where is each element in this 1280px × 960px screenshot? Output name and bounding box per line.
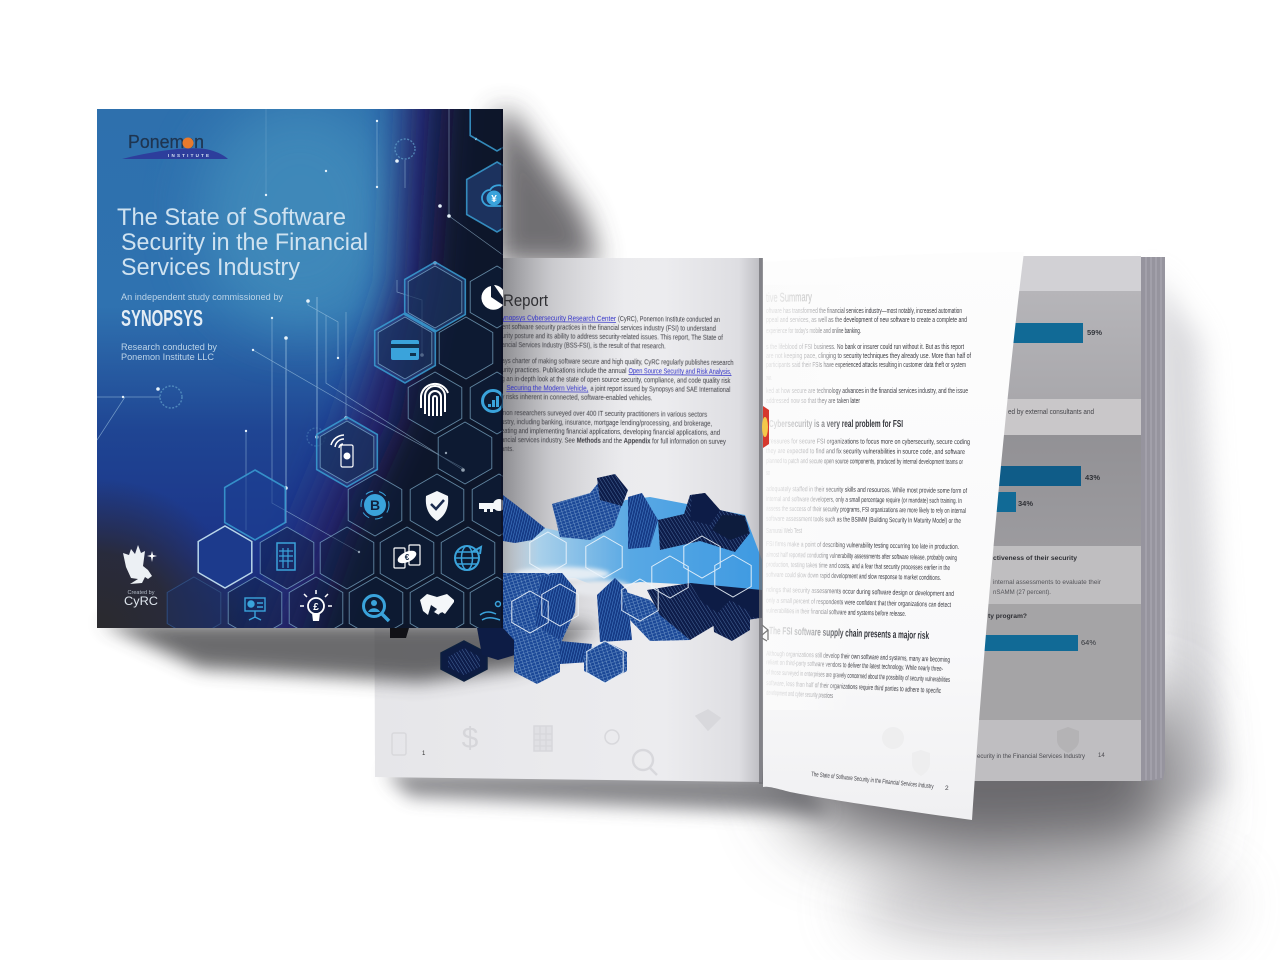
hexagon grid thin: [228, 266, 503, 628]
book cover: [97, 109, 503, 628]
back page stack edge: [1140, 257, 1165, 781]
research conducted by: Ponemon Institute LLC: [121, 352, 214, 363]
cybersecurity paragraph 3: [766, 541, 959, 582]
icon: cloud yen: ¥: [491, 194, 497, 205]
watermark: shield: [912, 750, 930, 776]
cybersecurity paragraph 2: internal and software developers, only a small percentage require (or mandate) such training. In: [766, 496, 962, 505]
icon: presentation board: [245, 598, 265, 620]
icon: handshake: [420, 594, 454, 616]
commissioned by: An independent study commissioned by: [121, 292, 283, 303]
page heading: Executive Summary: tive Summary: [766, 289, 812, 305]
watermark icons: right page: [882, 727, 930, 776]
watermark shield: [1057, 727, 1079, 753]
hexagon fills: lit cells: [225, 162, 527, 540]
icon: shield: [426, 491, 448, 521]
building: top hex: [597, 474, 628, 506]
publisher logo: Ponemon Institute: [122, 134, 228, 159]
band: chart 59%: [980, 291, 1141, 399]
paragraph 1: ynopsys Cybersecurity Research Center: [502, 315, 617, 323]
cybersecurity paragraph 3: software could slow down rapid development and slow response to market conditions.: [766, 572, 941, 582]
body text: [993, 579, 1101, 596]
body text: internal assessments to evaluate their: [993, 579, 1101, 586]
section heading: cybersecurity: Cybersecurity is a very real problem for FSI: [769, 418, 903, 430]
paragraph 1: [502, 315, 723, 351]
watermark: handshake: [696, 710, 720, 730]
swoosh: [122, 148, 228, 159]
icon: search person: [364, 596, 389, 621]
CyRC eagle logo: [123, 545, 158, 608]
cover base: [97, 109, 430, 628]
summary paragraph 2: participants said their FSIs have experienced attacks resulting in customer data theft or system: [766, 362, 966, 369]
supply chain paragraph: software, less than half of their organizations require third parties to adhere to specific: [766, 680, 942, 695]
icon: globe: [455, 546, 481, 570]
paragraph 3: [501, 410, 727, 455]
watermark: calculator: [534, 726, 552, 751]
icon: red gear: [762, 406, 769, 448]
skyline image: upper buildings: [503, 474, 750, 552]
cybersecurity paragraph 4: ndings that security assessments occur during software design or development and: [766, 587, 954, 598]
CyRC wordmark: CyRC: [124, 596, 158, 608]
paragraph 2: y risks inherent in connected, software-enabled vehicles.: [501, 394, 652, 402]
building: connector: [560, 641, 592, 664]
cover shadow on white background: [495, 112, 600, 265]
left open page: [100, 258, 762, 782]
Synopsys logo: SYNOPSYS: [121, 305, 203, 331]
icon: cloud yen: [481, 184, 503, 207]
summary paragraph 2: are not keeping pace, clinging to security techniques they already use. More than half of: [766, 353, 971, 360]
paragraph 2: Securing the Modern Vehicle,: [506, 385, 588, 393]
paragraph 2: ays charter of making software secure and high quality, CyRC regularly publishes research: [502, 358, 734, 367]
band: top: [980, 256, 1141, 291]
summary paragraph 2: [766, 344, 971, 382]
watermark: search: [633, 750, 657, 775]
paragraph 2: [501, 358, 734, 403]
supply chain paragraph: Although organizations still develop their own software and systems, many are becoming: [766, 651, 950, 664]
summary paragraph 3: ked at how secure are technology advances in the financial services industry, and the issue: [766, 388, 968, 395]
summary paragraph 2: own.: [766, 375, 772, 382]
cybersecurity paragraph 1: [766, 438, 970, 477]
icon: mobile payment: [331, 435, 353, 467]
page footer: The State of Software Security in the Financial Services Industry: [811, 771, 934, 790]
icon: bitcoin: B: [370, 497, 380, 513]
cybersecurity paragraph 4: vulnerabilities in their financial software and systems before release.: [766, 608, 906, 618]
body text: nSAMM (27 percent).: [993, 589, 1051, 596]
title: [117, 204, 368, 281]
icon: supply chain: [762, 625, 768, 641]
page number 2: 2: [945, 785, 949, 792]
watermark: phone: [392, 733, 406, 755]
research conducted by: Research conducted by: [121, 342, 217, 353]
building: right low: [620, 590, 690, 641]
title: Security in the Financial: [121, 229, 368, 256]
supply chain paragraph: of those surveyed in enterprises are gravely concerned about the possibility of security vulnerabilities: [766, 669, 950, 684]
supply chain paragraph: development and cyber security practices: [766, 690, 833, 700]
cybersecurity paragraph 3: FSI firms make a point of describing vulnerability testing occurring too late in production.: [766, 541, 959, 551]
black bookmark tab: [390, 628, 409, 638]
paragraph 3: ancial services industry. See Methods and the Appendix for full information on survey: [501, 437, 726, 446]
paragraph 1: ancial Services Industry (BSS-FSI), is the result of that research.: [502, 342, 666, 350]
fade near spine: [764, 285, 850, 710]
summary paragraph 1: oftware has transformed the financial services industry—most notably, increased automation: [766, 308, 962, 315]
circuit rings: [160, 139, 415, 446]
bar 64%: [975, 635, 1096, 651]
bar 64%: 64%: [1081, 638, 1096, 647]
hexagon grid bright: [224, 109, 503, 541]
cybersecurity paragraph 3: almost half reported conducting vulnerability assessments after software release, probably owing: [766, 552, 957, 562]
icon: calculator: [277, 543, 295, 570]
watermark: dollar: $: [462, 722, 479, 755]
footer text: ecurity in the Financial Services Industry: [977, 753, 1086, 760]
cybersecurity paragraph 1: ison: [766, 470, 770, 477]
summary paragraph 2: s the lifeblood of FSI business. No bank or insurer could run without it. But as this report: [766, 344, 964, 351]
back page: report chart page: [960, 256, 1141, 781]
paragraph 2: a joint report issued by Synopsys and SAE International: [590, 386, 731, 394]
watermark icons: left page: [392, 710, 720, 775]
summary paragraph 1: experience for today's mobile and online banking.: [766, 328, 861, 335]
cover dark right side: [288, 109, 503, 628]
building: far left: [503, 495, 545, 543]
bar 59%: 59%: [1087, 328, 1102, 337]
summary paragraph 1: [766, 308, 967, 335]
summary paragraph 1: ppeal and services, as well as the development of new software to create a complete and: [766, 317, 967, 324]
watermark: bitcoin: [882, 727, 904, 749]
cover shadow on page: [503, 258, 625, 630]
cybersecurity paragraph 2: Samurai Web Test: [766, 528, 802, 535]
band: footer: [960, 720, 1141, 781]
cybersecurity paragraph 4: only a small percent of respondents were confident that their organizations can detect: [766, 597, 951, 609]
cybersecurity paragraph 2: adequately staffed in their security skills and resources. While most provide some form of: [766, 486, 967, 495]
cybersecurity paragraph 2: [766, 486, 967, 535]
sun dot: [182, 138, 194, 148]
icon: credit card: [391, 340, 419, 360]
spine shadow: [759, 258, 763, 784]
page number 1: 1: [422, 751, 426, 757]
bar 34%: 34%: [1018, 499, 1033, 508]
icon: key: [479, 499, 505, 512]
cybersecurity paragraph 2: software assessment tools such as the BSIMM (Building Security In Maturity Model) or the: [766, 516, 961, 525]
summary paragraph 3: [766, 388, 968, 405]
faint hexagon: [166, 576, 222, 628]
bar 43%: 43%: [1085, 473, 1100, 482]
intro body text: [501, 315, 734, 455]
footer text: 14: [1098, 753, 1105, 759]
icon: bitcoin: [361, 491, 389, 519]
right curled white page: [759, 252, 1024, 820]
institute: INSTITUTE: [168, 153, 209, 158]
building hex: far left: [441, 641, 487, 681]
building: dark cluster: [477, 628, 520, 660]
icon: light bulb pound: £: [313, 602, 319, 613]
bar 34%: [985, 492, 1033, 512]
cover purple mid tone: [278, 109, 463, 628]
icon: phones euro: €: [405, 553, 410, 562]
summary text: [766, 308, 971, 792]
title: Services Industry: [121, 254, 301, 281]
icon: light bulb pound: [300, 590, 332, 621]
band: note: [980, 399, 1141, 435]
note text: ed by external consultants and: [1008, 409, 1094, 416]
created by: Created by: [128, 590, 155, 596]
star: [147, 551, 157, 562]
cover right edge: [501, 109, 503, 628]
paragraph 3: eating and implementing financial applications, developing financial applications, and: [501, 428, 720, 437]
paragraph 3: ants.: [501, 446, 514, 453]
band: chart 43% 34%: [960, 435, 1141, 546]
band: question: [960, 546, 1141, 604]
skyline image: white hexagon overlay: [512, 532, 751, 683]
pie icon on page: [481, 285, 503, 310]
cybersecurity paragraph 3: production, testing takes time and costs, and a fear that security processes earlier in the: [766, 561, 950, 572]
icon: bar chart circle: [482, 390, 504, 412]
ground shadow: [385, 270, 1230, 950]
cover dark corner: [97, 486, 230, 628]
bar 43%: [985, 466, 1100, 486]
cybersecurity paragraph 2: assess the success of their security programs, FSI organizations are more likely to rely on internal: [766, 506, 966, 515]
wordmark: Ponemon: [128, 131, 204, 152]
building: right cluster: [658, 493, 750, 552]
building: center: [628, 493, 658, 549]
section heading: supply chain: The FSI software supply chain presents a major risk: [769, 625, 929, 642]
page heading: Report: Report: [503, 291, 548, 310]
cybersecurity paragraph 1: they are expected to find and fix security vulnerabilities in source code, and software: [766, 448, 965, 456]
research conducted by: [122, 344, 217, 360]
paragraph 1: (CyRC), Ponemon Institute conducted an: [618, 316, 720, 324]
summary paragraph 3: addressed now so that they are taken later: [766, 398, 860, 405]
question heading: ctiveness of their security: [993, 555, 1077, 562]
icon: wave: [480, 602, 500, 620]
paragraph 2: urity practices. Publications include the annual: [502, 367, 627, 375]
paragraph 2: g an in-depth look at the state of open source security, compliance, and code quality risk: [501, 376, 731, 385]
paragraph 1: ent software security practices in the financial services industry (FSI) to understand: [502, 324, 716, 333]
bar 59%: [1000, 323, 1102, 343]
circuit dots: [122, 120, 477, 553]
paragraph 2: Open Source Security and Risk Analysis,: [629, 368, 732, 376]
cover light glow: [200, 100, 400, 330]
skyline image: lower buildings: [441, 573, 762, 684]
icon: fingerprint: [421, 384, 448, 416]
building: center tower: [597, 578, 632, 642]
paragraph 3: mon researchers surveyed over 400 IT security practitioners in various sectors: [501, 410, 708, 419]
paragraph 3: ustry, including banking, insurance, mortgage lending/processing, and brokerage,: [501, 419, 712, 428]
band: chart 64%: [960, 604, 1141, 720]
cybersecurity paragraph 1: pressures for secure FSI organizations to focus more on cybersecurity, secure coding: [766, 438, 970, 446]
building: bottom hex: [584, 641, 627, 683]
cover shadow: bottom: [100, 622, 600, 682]
watermark: bulb: [605, 730, 619, 744]
circuit lines: [97, 109, 503, 552]
pale hexagon: [198, 526, 252, 588]
cybersecurity paragraph 4: [766, 587, 954, 618]
question 2: ty program?: [988, 613, 1027, 620]
supply chain paragraph: [766, 651, 950, 700]
building: main tower: [503, 573, 576, 684]
paragraph 1: urity posture and its ability to address security-related issues. This report, The State of: [502, 333, 723, 342]
skyline image: sky: [503, 497, 762, 596]
supply chain paragraph: reliant on third-party software vendors to deliver the latest technology. While nearly three-: [766, 659, 944, 673]
cybersecurity paragraph 1: planned to patch and secure open source components, produced by internal development teams or: [766, 458, 963, 466]
icon: phones euro: [394, 545, 420, 568]
building: left tower: [552, 477, 627, 540]
title: The State of Software: [117, 204, 346, 231]
